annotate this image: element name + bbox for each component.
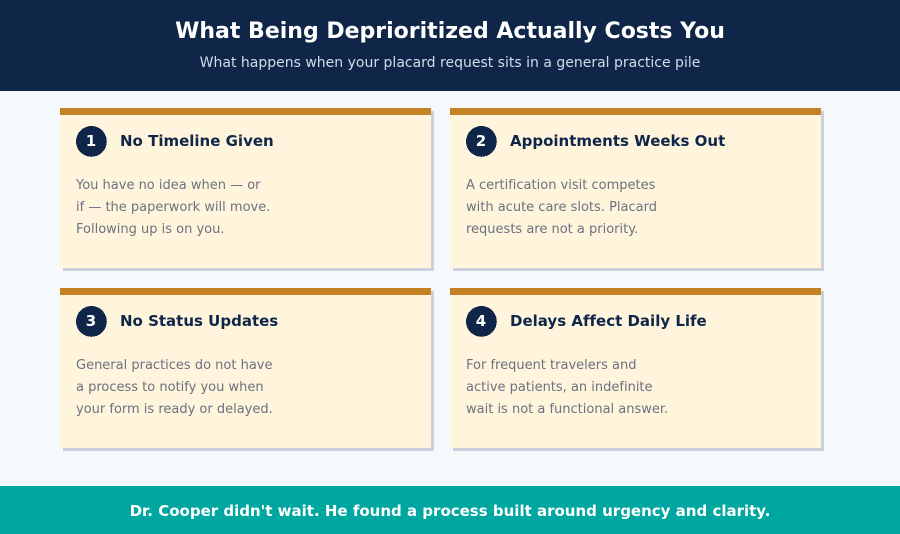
panel: no timeline given <box>60 108 434 271</box>
text block: no status updates: General practices do not have <box>76 358 272 373</box>
text block: appointments weeks out: with acute care slots. Placard <box>466 200 657 215</box>
icon: number 3: 3 <box>86 312 96 330</box>
text block: no timeline given: You have no idea when — or <box>75 178 261 193</box>
text block: no status updates: a process to notify you when <box>76 380 264 395</box>
heading: no status updates: No Status Updates <box>120 312 278 330</box>
text block: no timeline given <box>75 178 270 237</box>
heading: no timeline given: No Timeline Given <box>120 132 274 150</box>
panel: appointments weeks out <box>450 108 824 271</box>
icon: number 4 <box>466 306 497 337</box>
heading: appointments weeks out: Appointments Weeks Out <box>510 132 725 150</box>
text block: no status updates <box>76 358 273 417</box>
text block: delays affect daily life: wait is not a functional answer. <box>466 402 668 417</box>
text block: no status updates: your form is ready or delayed. <box>76 402 273 417</box>
text block: appointments weeks out <box>466 178 657 237</box>
title: What Being Deprioritized Actually Costs You <box>175 19 725 44</box>
subtitle: What happens when your placard request sits in a general practice pile <box>200 55 700 71</box>
footer banner <box>0 486 900 534</box>
text block: delays affect daily life: active patients, an indefinite <box>466 380 653 395</box>
text block: no timeline given: if — the paperwork will move. <box>76 200 270 215</box>
footer text: Dr. Cooper didn't wait. He found a process built around urgency and clarity. <box>130 502 770 520</box>
icon: number 1: 1 <box>86 132 96 150</box>
text block: no timeline given: Following up is on you. <box>76 222 224 237</box>
heading: delays affect daily life: Delays Affect Daily Life <box>510 312 707 330</box>
icon: number 4: 4 <box>476 312 486 330</box>
icon: number 3 <box>76 306 107 337</box>
panel: delays affect daily life <box>450 288 824 451</box>
text block: appointments weeks out: requests are not a priority. <box>466 222 638 237</box>
text block: delays affect daily life: For frequent travelers and <box>466 358 636 373</box>
icon: number 2: 2 <box>476 132 486 150</box>
header banner <box>0 0 900 91</box>
icon: number 1 <box>76 126 107 157</box>
panel: no status updates <box>60 288 434 451</box>
text block: appointments weeks out: A certification visit competes <box>466 178 656 193</box>
text block: delays affect daily life <box>466 358 668 417</box>
icon: number 2 <box>466 126 497 157</box>
